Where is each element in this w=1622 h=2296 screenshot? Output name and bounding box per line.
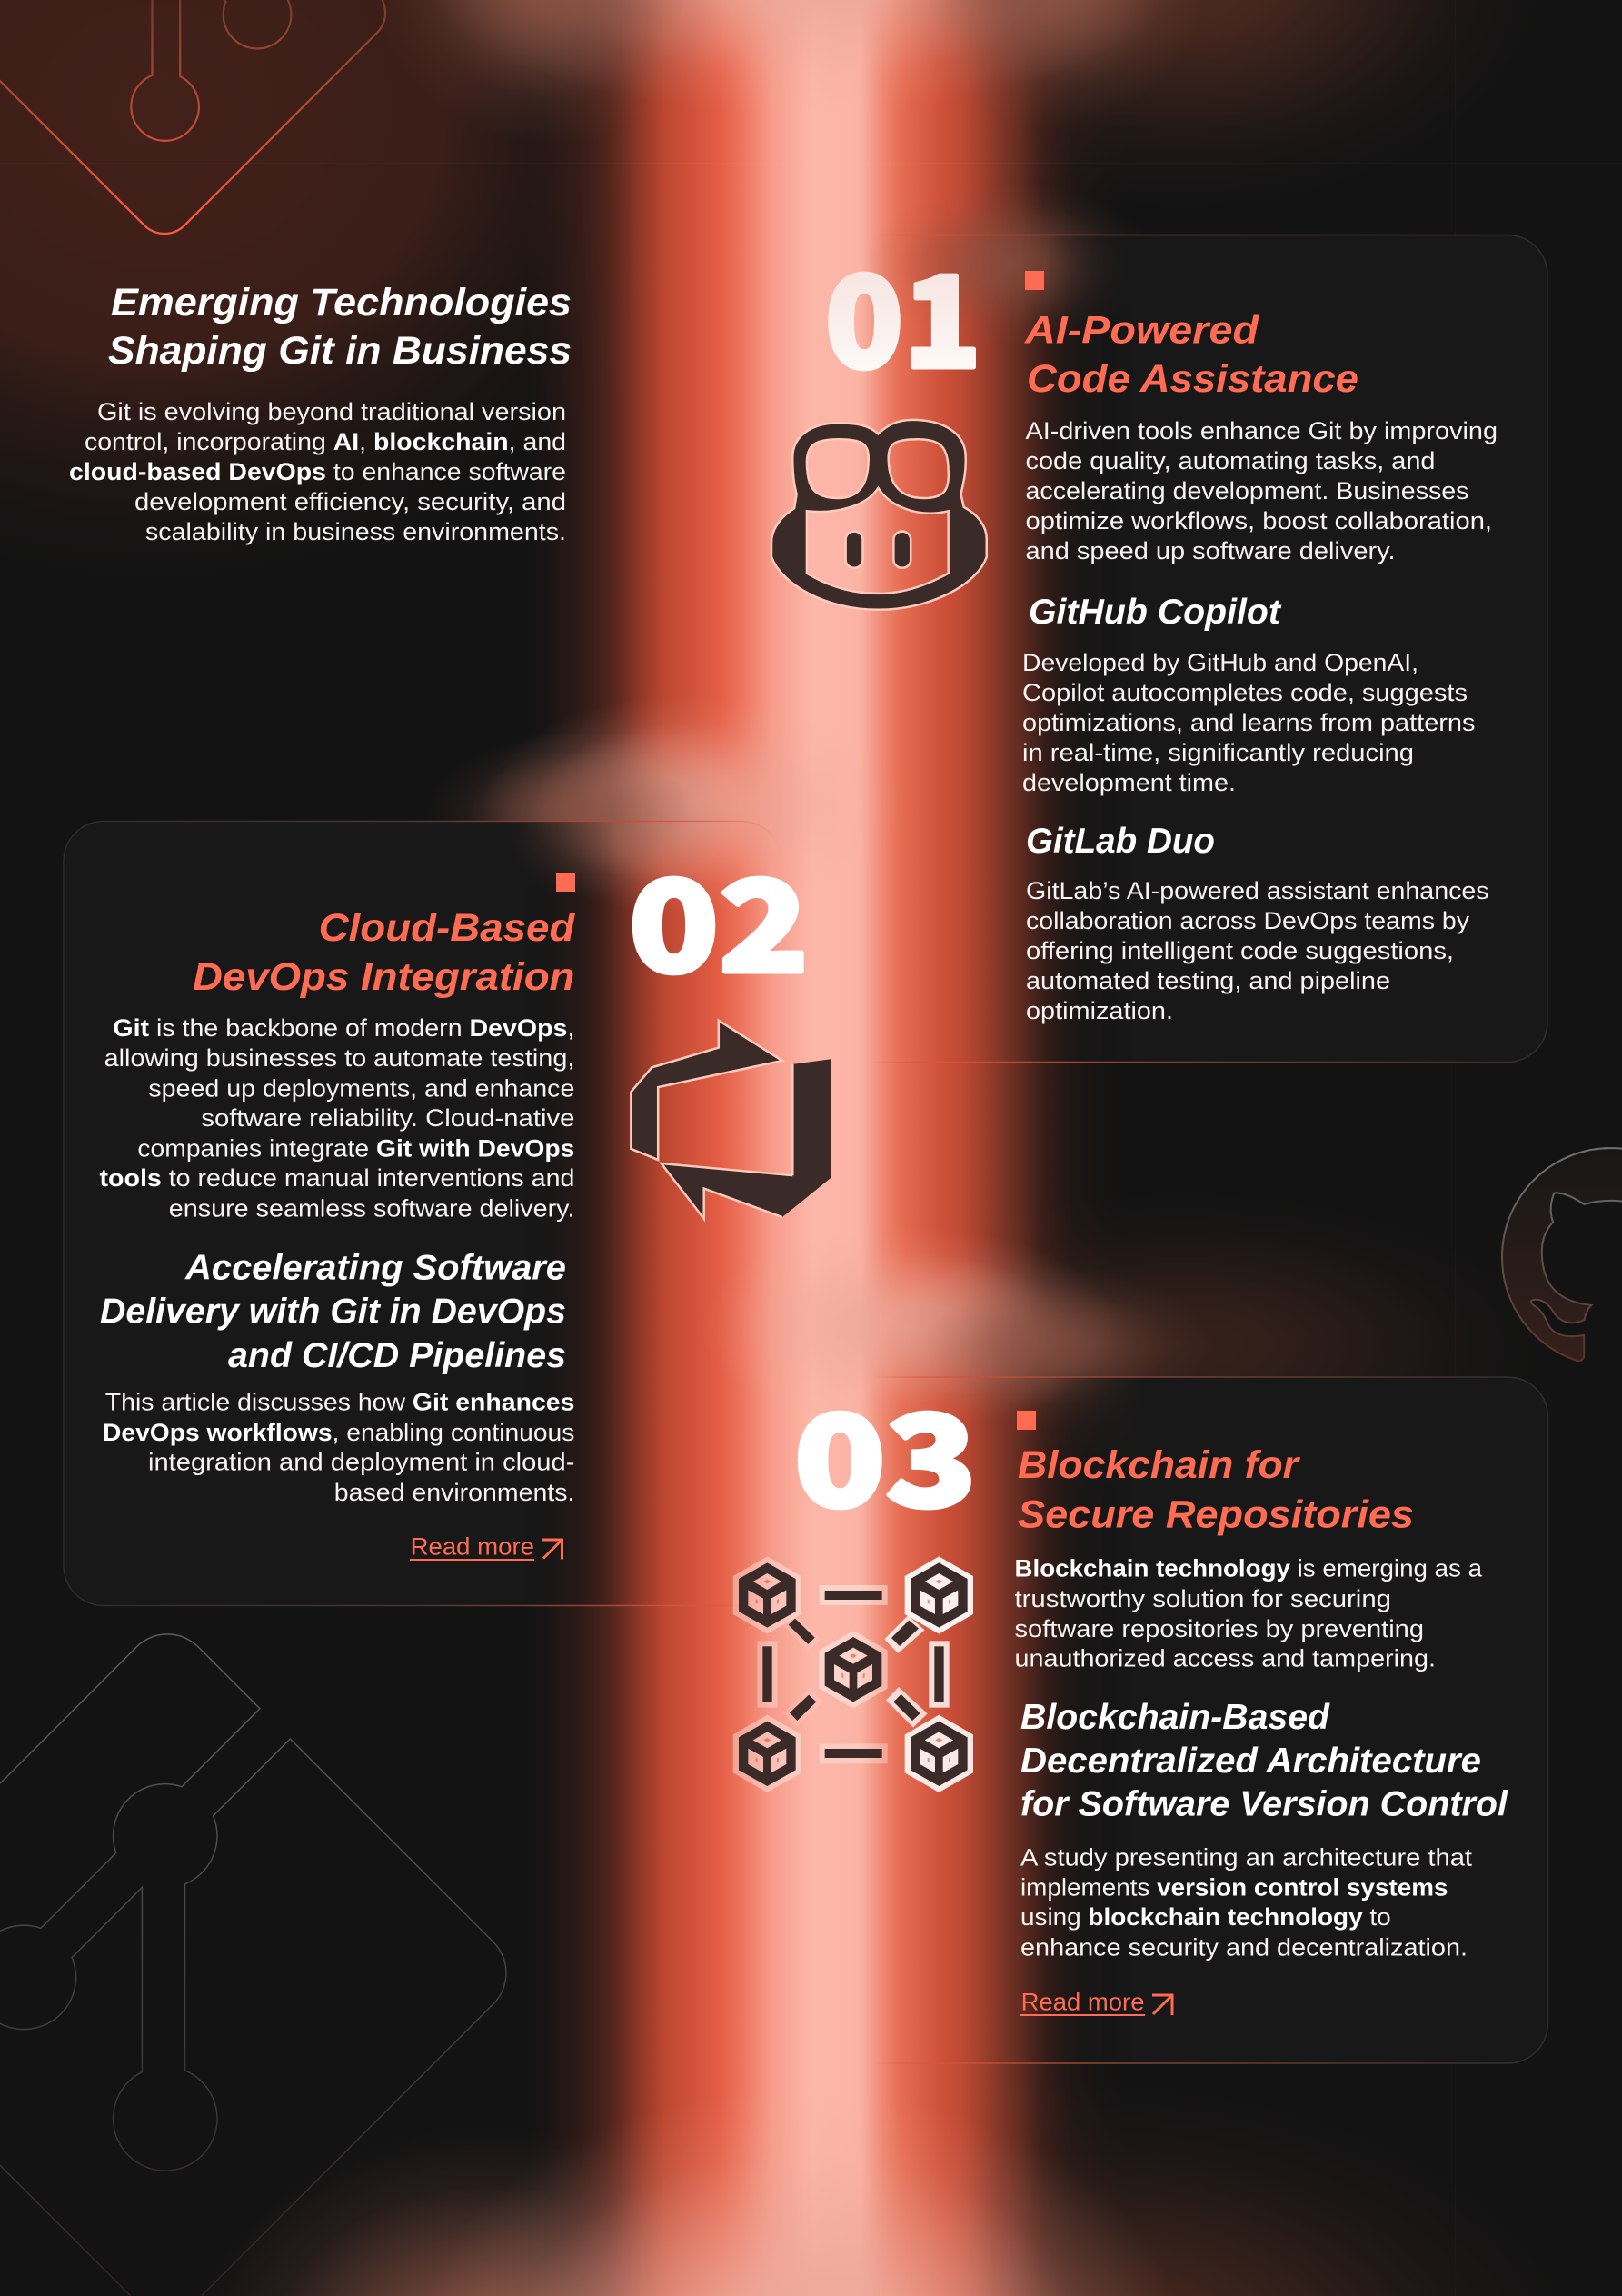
intro paragraph: cloud-based DevOps to enhance software xyxy=(69,458,566,485)
paragraph: article summary xyxy=(103,1389,574,1506)
paragraph: GitHub Copilot: optimizations, and learns from patterns xyxy=(1022,709,1476,736)
panel: card 03 blockchain for secure repositories xyxy=(733,1361,1548,2063)
paragraph: Git backbone of DevOps: speed up deployments, and enhance xyxy=(148,1074,574,1102)
paragraph: AI-driven tools: code quality, automating tasks, and xyxy=(1025,447,1436,474)
panel: card 01 AI-powered code assistance xyxy=(745,222,1547,1062)
paragraph: Git backbone of DevOps: tools to reduce manual interventions and xyxy=(100,1164,574,1192)
subheading: GitLab Duo: GitLab Duo xyxy=(1026,822,1215,861)
link: read more: Read more xyxy=(411,1533,534,1561)
subheading: decentralized architecture: Decentralized Architecture xyxy=(1020,1742,1481,1781)
subheading: accelerating software delivery: and CI/CD Pipelines xyxy=(228,1336,566,1375)
icon: blockchain network xyxy=(733,1556,973,1792)
paragraph: GitHub Copilot: in real-time, significantly reducing xyxy=(1022,739,1414,766)
icon: azure devops xyxy=(631,1021,831,1219)
heading: Blockchain for xyxy=(1018,1443,1300,1487)
paragraph: study summary: implements version control systems xyxy=(1020,1874,1448,1902)
paragraph: GitHub Copilot: Copilot autocompletes code, suggests xyxy=(1022,679,1468,706)
paragraph: AI-driven tools: and speed up software delivery. xyxy=(1025,537,1396,564)
intro paragraph: Git is evolving beyond traditional version xyxy=(97,398,566,425)
intro block xyxy=(69,281,572,545)
paragraph: GitLab Duo: optimization. xyxy=(1026,997,1173,1024)
intro paragraph xyxy=(69,398,566,545)
icon: git logo top left xyxy=(0,0,385,234)
intro paragraph: scalability in business environments. xyxy=(145,518,566,545)
title xyxy=(108,281,572,373)
heading: Code Assistance xyxy=(1027,357,1358,401)
accent square xyxy=(1025,271,1044,290)
paragraph: article summary: integration and deployment in cloud- xyxy=(148,1449,574,1476)
accent square xyxy=(556,873,575,892)
paragraph: Git backbone of DevOps: ensure seamless software delivery. xyxy=(169,1195,574,1223)
accent square xyxy=(1017,1411,1036,1430)
paragraph: article summary: based environments. xyxy=(334,1479,574,1506)
paragraph: blockchain technology xyxy=(1014,1555,1483,1672)
paragraph: AI-driven tools: accelerating development. Businesses xyxy=(1025,477,1468,504)
intro paragraph: development efficiency, security, and xyxy=(134,488,566,515)
title: Shaping Git in Business xyxy=(108,329,572,373)
heading: Secure Repositories xyxy=(1018,1493,1414,1537)
paragraph: GitLab Duo: GitLab’s AI-powered assistant enhances xyxy=(1026,877,1489,904)
title: Emerging Technologies xyxy=(111,281,572,324)
paragraph: Git backbone of DevOps: software reliability. Cloud-native xyxy=(201,1104,574,1132)
heading xyxy=(1018,1443,1414,1537)
paragraph: GitHub Copilot xyxy=(1022,649,1476,796)
subheading: decentralized architecture: for Software Version Control xyxy=(1020,1785,1508,1823)
paragraph: GitLab Duo: automated testing, and pipeline xyxy=(1026,967,1390,994)
paragraph: Git backbone of DevOps xyxy=(100,1014,574,1223)
subheading: decentralized architecture xyxy=(1020,1698,1508,1823)
heading: DevOps Integration xyxy=(193,955,574,999)
paragraph: study summary: enhance security and decentralization. xyxy=(1020,1934,1468,1962)
link: read more: Read more xyxy=(1021,1989,1145,2016)
subheading: accelerating software delivery xyxy=(100,1249,566,1375)
subheading: decentralized architecture: Blockchain-Based xyxy=(1020,1698,1331,1737)
heading: AI-Powered xyxy=(1024,309,1259,353)
paragraph: blockchain technology: Blockchain technology is emerging as a xyxy=(1014,1555,1483,1582)
icon: copilot xyxy=(771,420,987,610)
icon: git logo bottom left xyxy=(0,1634,506,2295)
heading xyxy=(193,906,575,999)
paragraph: AI-driven tools: optimize workflows, boost collaboration, xyxy=(1025,507,1492,534)
paragraph: Git backbone of DevOps: companies integrate Git with DevOps xyxy=(137,1135,574,1163)
paragraph: article summary: DevOps workflows , enabling continuous xyxy=(103,1419,574,1446)
paragraph: article summary: This article discusses how Git enhances xyxy=(105,1389,574,1416)
intro paragraph: control, incorporating AI, blockchain , and xyxy=(85,428,566,455)
number 01: 01 xyxy=(825,222,981,404)
icon: github logo right xyxy=(1502,1148,1622,1361)
paragraph: GitHub Copilot: Developed by GitHub and OpenAI, xyxy=(1022,649,1418,676)
subheading: GitHub Copilot: GitHub Copilot xyxy=(1029,593,1282,632)
paragraph: study summary: A study presenting an architecture that xyxy=(1020,1843,1473,1871)
paragraph: blockchain technology: trustworthy solution for securing xyxy=(1014,1585,1391,1612)
paragraph: Git backbone of DevOps: allowing businesses to automate testing, xyxy=(104,1044,574,1072)
paragraph: blockchain technology: unauthorized access and tampering. xyxy=(1014,1645,1436,1672)
paragraph: AI-driven tools: AI-driven tools enhance Git by improving xyxy=(1025,417,1498,444)
paragraph: GitLab Duo xyxy=(1026,877,1489,1024)
paragraph: GitHub Copilot: development time. xyxy=(1022,769,1236,796)
heading xyxy=(1024,309,1358,401)
paragraph: GitLab Duo: collaboration across DevOps teams by xyxy=(1026,907,1470,934)
number 03: 03 xyxy=(794,1361,977,1543)
number 02: 02 xyxy=(629,826,809,1009)
paragraph: study summary: using blockchain technology to xyxy=(1020,1903,1391,1931)
panel: card 02 cloud-based DevOps integration xyxy=(64,822,831,1605)
subheading: accelerating software delivery: Accelerating Software xyxy=(184,1249,566,1287)
paragraph: AI-driven tools xyxy=(1025,417,1498,564)
paragraph: Git backbone of DevOps: Git is the backbone of modern DevOps, xyxy=(113,1014,574,1042)
paragraph: study summary xyxy=(1020,1843,1473,1962)
subheading: accelerating software delivery: Delivery with Git in DevOps xyxy=(100,1293,566,1332)
heading: Cloud-Based xyxy=(319,906,575,950)
paragraph: GitLab Duo: offering intelligent code suggestions, xyxy=(1026,937,1454,964)
paragraph: blockchain technology: software repositories by preventing xyxy=(1014,1615,1424,1642)
